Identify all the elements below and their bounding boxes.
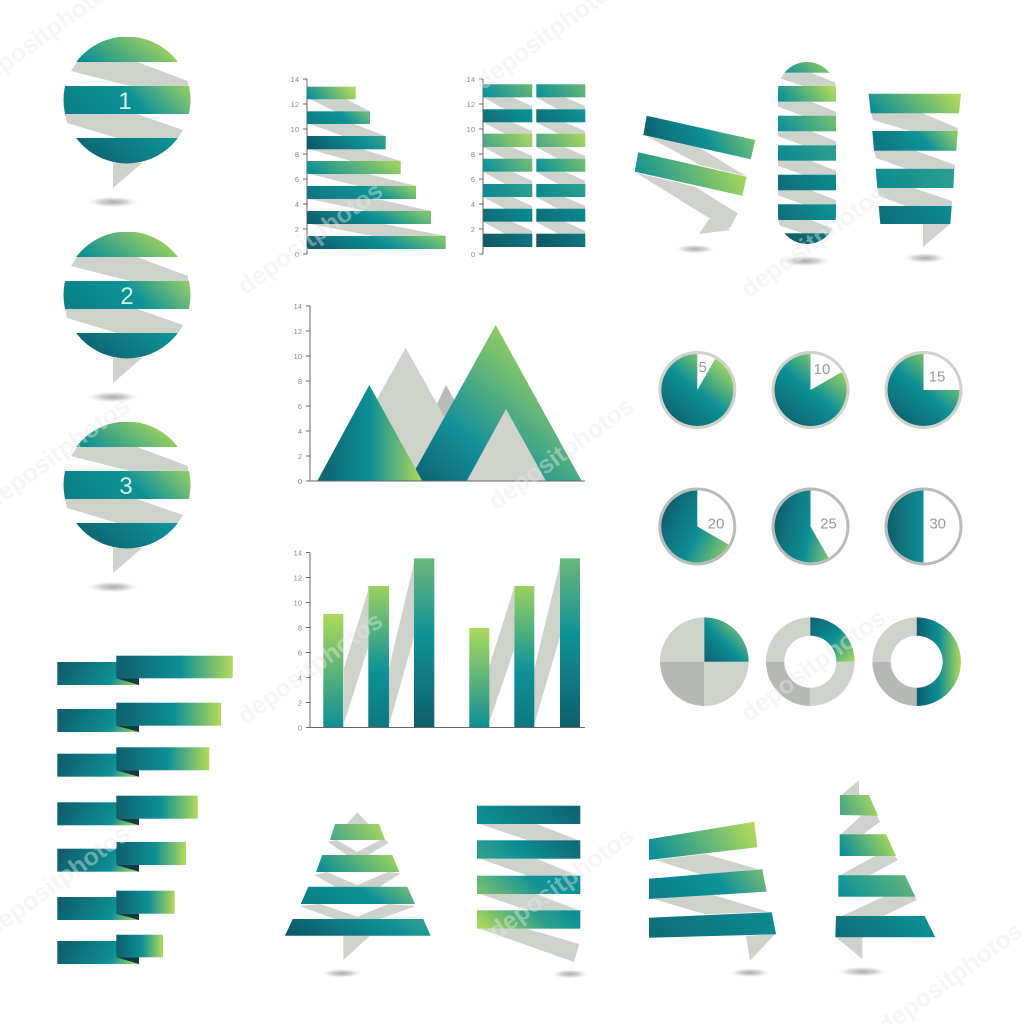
column ribbon chart: 6 xyxy=(298,648,302,658)
watermark: depositphotos xyxy=(483,822,639,945)
pie dial 5: 5 xyxy=(699,359,707,376)
pie dial 10: 10 xyxy=(814,361,830,378)
half donut xyxy=(872,617,961,706)
column ribbon chart: 10 xyxy=(294,598,302,608)
folded ribbon list xyxy=(57,656,233,964)
pie dial 30 xyxy=(886,489,961,564)
stepped ribbon bar chart xyxy=(291,75,446,259)
speech bubble 2: 2 xyxy=(120,283,134,310)
pill ribbon stack xyxy=(777,62,836,267)
mountain chart: 0 xyxy=(298,477,302,486)
mountain chart: 14 xyxy=(294,302,302,311)
watermark: depositphotos xyxy=(232,177,388,300)
half ribbon tree xyxy=(835,780,935,977)
mountain chart: 12 xyxy=(294,327,302,336)
ribbon tree xyxy=(285,812,431,978)
watermark: depositphotos xyxy=(483,392,639,515)
quarter pie xyxy=(660,617,749,706)
stepped ribbon bar chart: 12 xyxy=(291,100,299,109)
stepped ribbon bar chart: 0 xyxy=(295,250,299,259)
pie dial 20 xyxy=(660,489,735,564)
two-column ribbon bar chart: 10 xyxy=(467,125,475,134)
stepped ribbon bar chart: 4 xyxy=(295,200,299,209)
column ribbon chart: 12 xyxy=(294,574,302,582)
column ribbon chart: 14 xyxy=(294,548,302,558)
two-column ribbon bar chart xyxy=(467,75,585,259)
two-column ribbon bar chart: 14 xyxy=(467,75,475,84)
two-column ribbon bar chart: 6 xyxy=(471,175,475,184)
right-leaning ribbon banner xyxy=(649,822,776,978)
two-column ribbon bar chart: 12 xyxy=(467,100,475,109)
pie dial 5 xyxy=(660,352,735,428)
pie dial 25 xyxy=(773,489,848,564)
stepped ribbon bar chart: 10 xyxy=(291,125,299,134)
speech bubble 3: 3 xyxy=(119,473,133,500)
mountain chart: 10 xyxy=(294,352,302,361)
column ribbon chart: 2 xyxy=(298,698,302,708)
mountain chart xyxy=(294,302,585,486)
speech bubble 1: 1 xyxy=(118,88,132,115)
stepped ribbon bar chart: 2 xyxy=(295,225,299,234)
pie dial 15 xyxy=(886,352,961,428)
pie dial 10 xyxy=(773,352,848,428)
two-column ribbon bar chart: 4 xyxy=(471,200,475,209)
mountain chart: 2 xyxy=(298,452,302,461)
column ribbon chart: 0 xyxy=(298,724,302,732)
speech bubble 1 xyxy=(60,37,194,208)
column ribbon chart: 8 xyxy=(298,624,302,632)
pie dial 25: 25 xyxy=(820,516,837,532)
watermark: depositphotos xyxy=(232,607,388,730)
speech bubble 3 xyxy=(60,422,194,593)
column ribbon chart xyxy=(294,548,585,732)
pie dial 15: 15 xyxy=(929,368,945,386)
straight ribbon stack xyxy=(477,806,590,979)
quarter donut xyxy=(766,617,855,706)
pie dial 20: 20 xyxy=(708,516,724,532)
watermark: depositphotos xyxy=(735,604,891,727)
two-column ribbon bar chart: 0 xyxy=(471,250,475,259)
tapered ribbon banner xyxy=(869,94,961,264)
column ribbon chart: 4 xyxy=(298,674,302,682)
tilted ribbon banner xyxy=(635,116,755,254)
mountain chart: 4 xyxy=(298,427,302,436)
pie dial 30: 30 xyxy=(929,516,946,532)
watermark: depositphotos xyxy=(735,180,891,303)
speech bubble 2 xyxy=(60,232,194,403)
mountain chart: 6 xyxy=(298,402,302,411)
mountain chart: 8 xyxy=(298,377,302,386)
two-column ribbon bar chart: 8 xyxy=(471,150,475,159)
stepped ribbon bar chart: 14 xyxy=(291,75,299,84)
two-column ribbon bar chart: 2 xyxy=(471,225,475,234)
stepped ribbon bar chart: 6 xyxy=(295,175,299,184)
stepped ribbon bar chart: 8 xyxy=(295,150,299,159)
